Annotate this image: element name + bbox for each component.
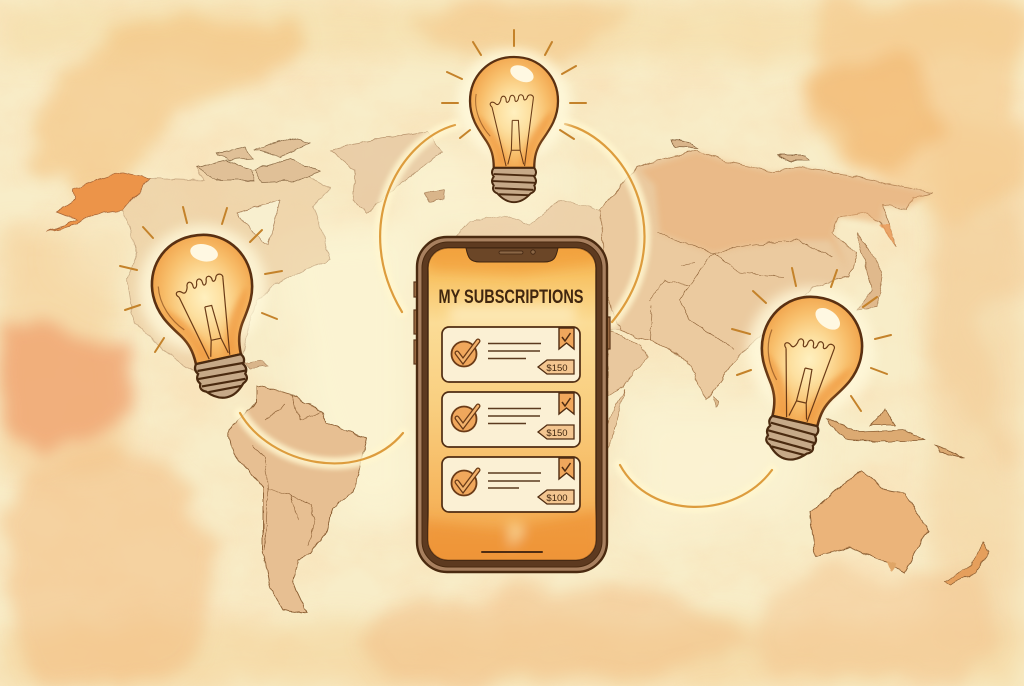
- icon: check circle: [452, 341, 478, 366]
- ribbon badge: [559, 393, 574, 414]
- icon: check circle: [452, 406, 478, 432]
- phone notch: [466, 248, 558, 262]
- pale ocean areas: [60, 150, 810, 540]
- card: subscription 2: [442, 392, 580, 447]
- map: asia borders: [650, 233, 833, 350]
- map: tasmania: [886, 562, 897, 571]
- phone side buttons: [414, 282, 610, 364]
- world map: [47, 132, 933, 613]
- text lines: [488, 473, 541, 488]
- map: australia: [810, 470, 928, 572]
- card: subscription 3: [442, 457, 580, 512]
- text lines: [488, 408, 541, 424]
- ribbon badge: [559, 458, 574, 479]
- arc: bottom-right: [620, 465, 772, 507]
- map: russia wash: [640, 152, 930, 270]
- map: sri lanka: [713, 396, 719, 407]
- map: arctic islands: [197, 138, 320, 182]
- icon: right light bulb: [724, 274, 888, 473]
- price tag: $150: [546, 428, 568, 439]
- price tag: $150: [546, 363, 568, 374]
- text lines: [488, 344, 541, 358]
- glowing connection arcs: [240, 124, 772, 507]
- map: new zealand: [945, 542, 990, 585]
- rays: left bulb: [120, 207, 282, 352]
- arc: top-right: [565, 124, 644, 322]
- map: hudson bay: [237, 200, 280, 245]
- rays: right bulb: [732, 268, 891, 411]
- card: subscription 1: [442, 327, 580, 382]
- rays: top bulb: [442, 30, 586, 139]
- icon: left light bulb: [127, 213, 289, 411]
- map: europe: [450, 200, 640, 330]
- map: russian arctic islands: [670, 140, 810, 160]
- map: japan: [857, 233, 883, 310]
- ribbon badge: [559, 328, 574, 349]
- screen title: MY SUBSCRIPTIONS: [438, 287, 584, 308]
- map: greenland: [330, 132, 442, 213]
- phone screen: [428, 248, 596, 560]
- icon: check circle: [452, 470, 478, 496]
- map: south america: [228, 385, 367, 613]
- map: caribbean: [246, 360, 268, 368]
- map: kamchatka: [880, 225, 897, 247]
- phone body: [417, 237, 607, 572]
- map: iceland: [424, 190, 445, 202]
- map: asia: [600, 150, 933, 400]
- arc: bottom-left: [240, 413, 403, 463]
- map: south america borders: [252, 395, 320, 550]
- arc: top-left: [380, 125, 455, 312]
- map: alaska: [47, 172, 150, 232]
- map: north america: [123, 162, 330, 385]
- price tag: $100: [546, 493, 568, 504]
- icon: top light bulb: [458, 48, 570, 202]
- screen washes: [428, 248, 596, 560]
- map: indonesia islands: [826, 410, 965, 458]
- map: arabia and africa: [600, 330, 647, 460]
- home indicator: [481, 551, 543, 553]
- phone: [414, 237, 610, 572]
